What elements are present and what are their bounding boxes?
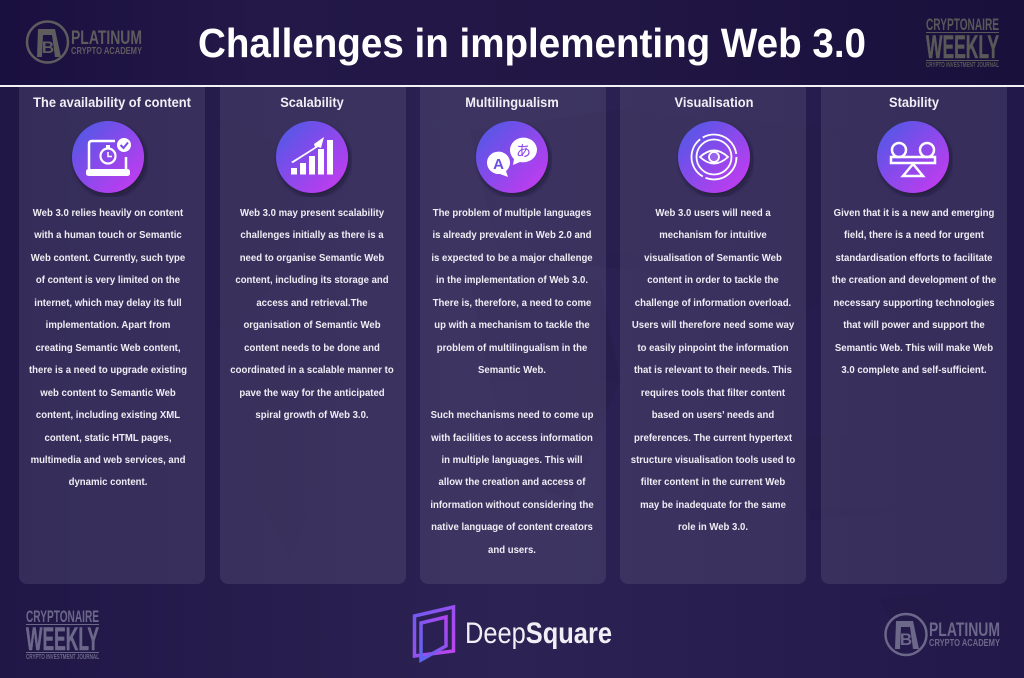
text: availability: dynamic content. [69,477,147,488]
logo: DeepSquare [412,604,612,663]
text: stability: standardisation efforts to facilitate [836,253,992,264]
text: visualisation: that is relevant to their needs. This [634,365,792,376]
panel: Visualisation [620,87,806,584]
text: visualisation: challenge of information overload. [635,298,791,309]
text: multilingualism: in the implementation of Web 3.0. [436,275,588,286]
text: availability: content, including existing XML [36,410,180,421]
logo: Platinum Crypto Academy, top left [26,20,142,64]
text: scalability: challenges initially as there is a [240,230,384,241]
text: scalability: organisation of Semantic Web [243,320,381,331]
text: stability: Given that it is a new and emerging [834,208,994,219]
text: multilingualism: is expected to be a major challenge [431,253,593,264]
text: multilingualism: allow the creation and access of [439,477,585,488]
text: stability: necessary supporting technologies [833,298,995,309]
text: multilingualism: information without considering the [430,500,594,511]
logo: Cryptonaire Weekly, top right [926,16,999,69]
text: stability: that will power and support the [843,320,985,331]
text: multilingualism: up with a mechanism to tackle the [434,320,590,331]
icon: speech bubbles with languages: あ [516,140,531,161]
text: scalability: spiral growth of Web 3.0. [255,410,369,421]
text: visualisation: role in Web 3.0. [678,522,748,533]
text: availability: implementation. Apart from [46,320,170,331]
text: multilingualism [430,208,594,556]
panel: Multilingualism [420,87,606,584]
text: scalability: content needs to be done and [244,343,380,354]
text: visualisation: based on users’ needs and [652,410,774,421]
heading: visualisation: Visualisation [674,95,753,110]
text: multilingualism: with facilities to access information [431,433,593,444]
text: availability: content, static HTML pages, [44,433,172,444]
text: availability: Web content. Currently, such type [31,253,185,264]
text: multilingualism: native language of content creators [431,522,593,533]
text: stability [832,208,996,376]
icon: balance seesaw [876,121,953,197]
text: visualisation: requires tools that filter content [641,388,785,399]
text: availability: Web 3.0 relies heavily on content [33,208,183,219]
text: scalability: Web 3.0 may present scalability [240,208,384,219]
text: stability: 3.0 complete and self-sufficient. [841,365,987,376]
text: scalability: access and retrieval.The [256,298,368,309]
text: visualisation: structure visualisation tools used to [631,455,795,466]
panel: The availability of content [19,87,205,584]
text: availability: of content is very limited on the [36,275,180,286]
text: availability: creating Semantic Web content, [35,343,181,354]
icon: eye in concentric rings [678,121,754,197]
text: scalability: need to organise Semantic Web [240,253,384,264]
text: stability: field, there is a need for urgent [844,230,984,241]
text: scalability [230,208,394,421]
logo: Cryptonaire Weekly, bottom left [26,608,99,661]
icon: speech bubbles with languages [476,121,552,197]
text: visualisation: may be inadequate for the same [640,500,786,511]
heading: stability: Stability [889,95,939,110]
text: visualisation: to easily pinpoint the information [637,343,789,354]
text: scalability: content, including its storage and [235,275,389,286]
text: visualisation [631,208,795,533]
text: availability: there is a need to upgrade existing [29,365,187,376]
text: multilingualism: The problem of multiple languages [433,208,591,219]
text: visualisation: visualisation of Semantic Web [644,253,782,264]
text: visualisation: mechanism for intuitive [659,230,767,241]
heading: availability: The availability of content [33,95,191,110]
text: visualisation: content in order to tackle the [647,275,779,286]
text: visualisation: Users will therefore need some way [632,320,794,331]
panel: Stability [821,87,1007,584]
text: scalability: coordinated in a scalable manner to [230,365,394,376]
heading: multilingualism: Multilingualism [465,95,559,110]
logo: Platinum Crypto Academy, top left: B [42,38,54,57]
text: multilingualism: is already prevalent in Web 2.0 and [433,230,591,241]
logo: Platinum Crypto Academy, bottom right [884,612,1000,656]
icon: laptop with clock and check [72,121,148,197]
text: availability [29,208,187,488]
heading: scalability: Scalability [280,95,344,110]
text: visualisation: Web 3.0 users will need a [655,208,771,219]
text: availability: with a human touch or Semantic [34,230,182,241]
text: stability: the creation and development of the [832,275,996,286]
text: multilingualism: in multiple languages. This will [441,455,583,466]
text: visualisation: preferences. The current hypertext [634,433,792,444]
icon: speech bubbles with languages: A [493,156,504,173]
text: multilingualism: There is, therefore, a need to come [433,298,591,309]
text: multilingualism: Such mechanisms need to come up [431,410,593,421]
text: multilingualism: and users. [488,545,536,556]
header rule [0,85,1024,87]
logo: Platinum Crypto Academy, bottom right: B [900,630,912,649]
icon: rising bar chart [276,121,352,197]
text: visualisation: filter content in the current Web [641,477,785,488]
text: multilingualism: Semantic Web. [478,365,546,376]
text: scalability: pave the way for the anticipated [239,388,385,399]
text: availability: multimedia and web services, and [31,455,185,466]
text: stability: Semantic Web. This will make Web [835,343,993,354]
text: multilingualism: problem of multilingualism in the [437,343,587,354]
text: availability: web content to Semantic Web [40,388,176,399]
panel: Scalability [220,87,406,584]
text: availability: internet, which may delay its full [34,298,182,309]
